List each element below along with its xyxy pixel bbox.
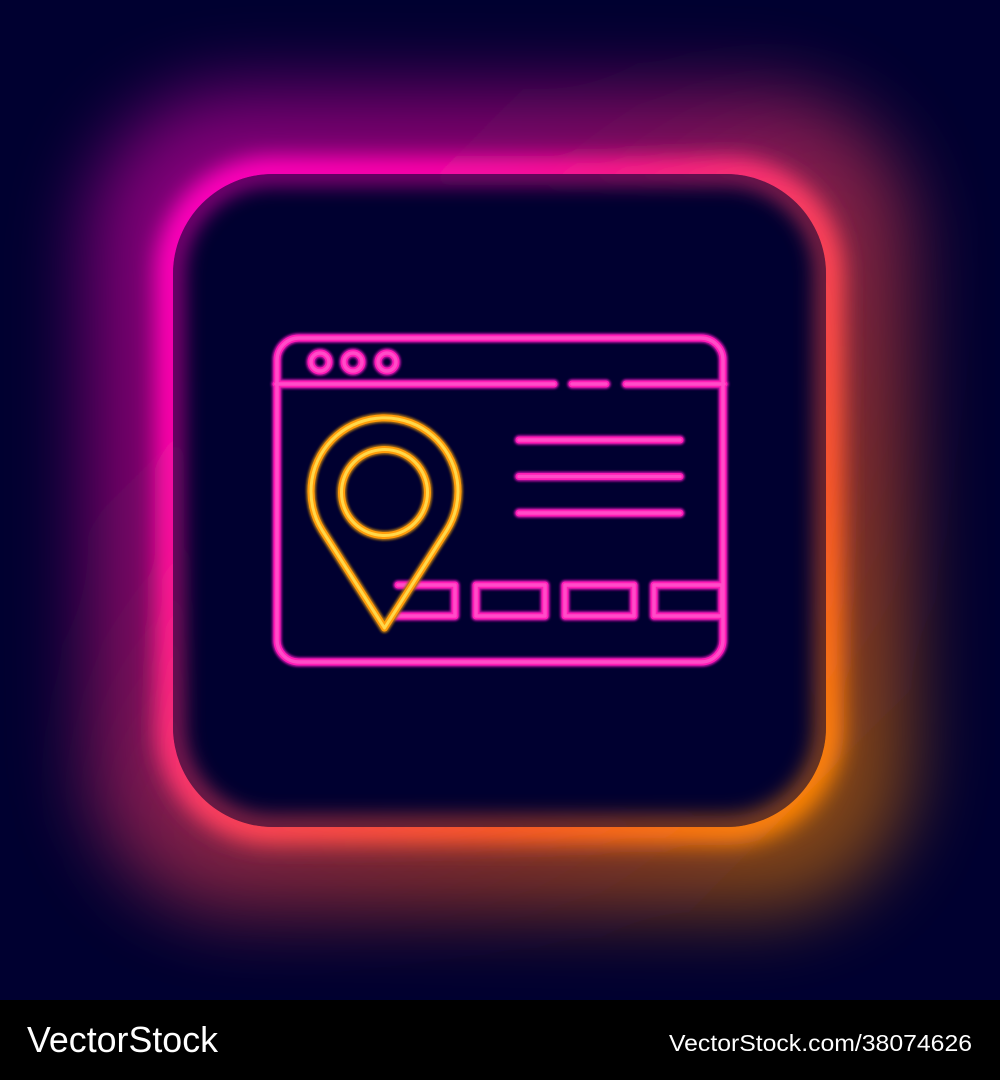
footer bar bbox=[0, 1000, 1000, 1080]
rounded square panel bbox=[173, 174, 826, 827]
footer image id: VectorStock.com/38074626 bbox=[669, 1030, 972, 1056]
icon: map pin bbox=[311, 418, 458, 628]
icon: browser window bbox=[276, 338, 724, 662]
footer logo: VectorStock bbox=[27, 1019, 219, 1060]
outer neon glow bbox=[88, 89, 911, 912]
